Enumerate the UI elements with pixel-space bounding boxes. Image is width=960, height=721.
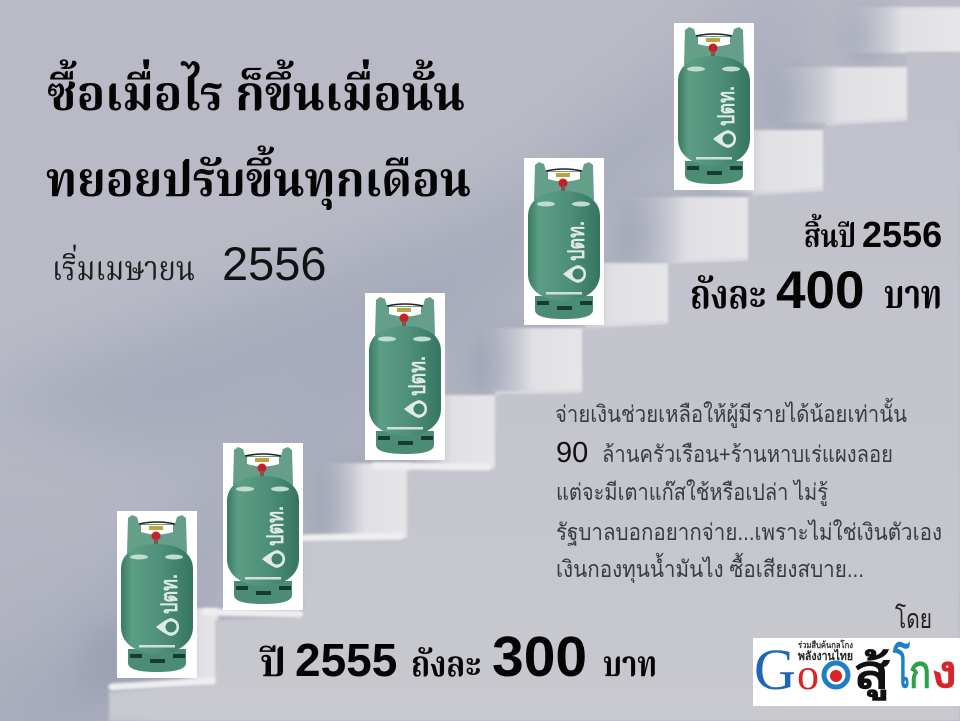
- price label: year 2555: ถังละ: [411, 644, 481, 684]
- title line 1: ซื้อเมื่อไร ก็ขึ้นเมื่อนั้น: [47, 59, 465, 121]
- icon: gas cylinder 1: [117, 511, 197, 678]
- price label: year 2555: 2555: [295, 634, 397, 686]
- subtitle: start date: เริ่มเมษายน: [52, 245, 195, 288]
- commentary text block: ล้านครัวเรือน+ร้านหาบเร่แผงลอย: [602, 441, 893, 467]
- logo: Goo สู้โกง: ง: [931, 648, 957, 697]
- price label: year 2555: ปี: [259, 643, 286, 685]
- logo: Goo สู้โกง: โ: [892, 640, 910, 698]
- logo: Goo สู้โกง: พลังงานไทย: [798, 648, 853, 663]
- icon: gas cylinder 2: [223, 443, 303, 610]
- commentary text block: [555, 398, 942, 583]
- credit label: โดย: [895, 604, 932, 634]
- commentary text block: จ่ายเงินช่วยเหลือให้ผู้มีรายได้น้อยเท่านั้น: [555, 398, 907, 428]
- icon: gas cylinder 4: ปตท.: [563, 221, 589, 261]
- price label: year 2555: บาท: [603, 644, 657, 684]
- price label: year 2555: [259, 625, 657, 689]
- subtitle: start date: 2556: [222, 237, 327, 290]
- price label: end of 2556: บาท: [884, 272, 942, 317]
- price label: end of 2556: 400: [776, 261, 864, 320]
- commentary text block: แต่จะมีเตาแก๊สใช้หรือเปล่า ไม่รู้: [556, 479, 828, 506]
- icon: gas cylinder 3: ปตท.: [404, 356, 430, 396]
- logo: Goo สู้โกง: สู้: [853, 646, 891, 701]
- price label: end of 2556: [690, 214, 942, 320]
- icon: gas cylinder 4: [524, 158, 604, 325]
- icon: gas cylinder 1: ปตท.: [156, 574, 182, 614]
- logo: Goo สู้โกง: G: [754, 637, 796, 702]
- icon: gas cylinder 5: [674, 23, 754, 190]
- logo: Goo สู้โกง: [753, 637, 960, 706]
- commentary text block: 90: [556, 437, 588, 469]
- subtitle: start date: [52, 237, 327, 290]
- price label: end of 2556: 2556: [862, 214, 942, 255]
- icon: gas cylinder 2: ปตท.: [262, 506, 288, 546]
- logo: Goo สู้โกง: ร่วมสืบค้นกลโกง: [798, 639, 853, 650]
- price label: end of 2556: ถังละ: [690, 272, 766, 317]
- price label: year 2555: 300: [492, 625, 587, 689]
- icon: gas cylinder 5: ปตท.: [713, 86, 739, 126]
- price label: end of 2556: สิ้นปี: [804, 214, 856, 254]
- logo: Goo สู้โกง: o: [797, 650, 819, 699]
- title line 2: ทยอยปรับขึ้นทุกเดือน: [46, 145, 471, 210]
- logo: Goo สู้โกง: ก: [909, 648, 931, 697]
- commentary text block: เงินกองทุนน้ำมันไง ซื้อเสียงสบาย...: [556, 553, 864, 583]
- icon: gas cylinder 3: [365, 293, 445, 460]
